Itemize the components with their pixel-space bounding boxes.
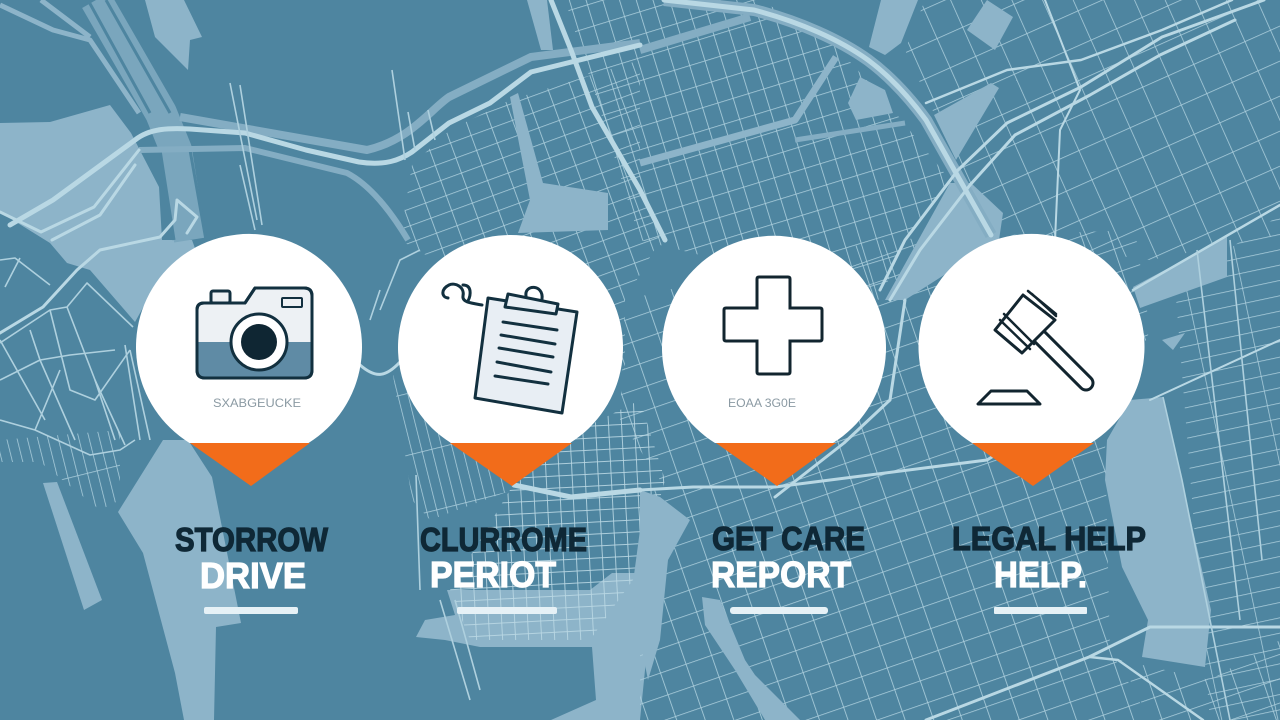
small label: SXABGEUCKE [213,396,301,410]
caption 4: HELP. [994,554,1087,595]
land beneath streets [416,573,648,720]
caption 3: REPORT [711,554,851,595]
icon: clipboard [443,284,577,413]
icon: gavel [978,291,1086,404]
caption 3 [711,520,865,614]
caption 1: DRIVE [200,555,306,596]
pin 2: clipboard [398,235,623,486]
caption 1: STORROW [175,521,329,558]
caption 2: CLURROME [420,521,587,558]
caption 3: GET CARE [712,520,865,557]
pin 3: medical cross [662,236,886,486]
caption 4 [952,520,1146,614]
icon: camera [197,288,312,378]
caption 2: PERIOT [430,554,556,595]
caption 4: LEGAL HELP [952,520,1146,557]
pin 1: camera [136,234,362,486]
highway band [96,0,190,240]
icon: cross [724,277,822,374]
caption 1 [175,521,329,614]
pin 4: gavel [918,234,1144,486]
small label: EOAA 3G0E [728,396,796,410]
caption 2 [420,521,587,614]
major roads [0,0,991,240]
